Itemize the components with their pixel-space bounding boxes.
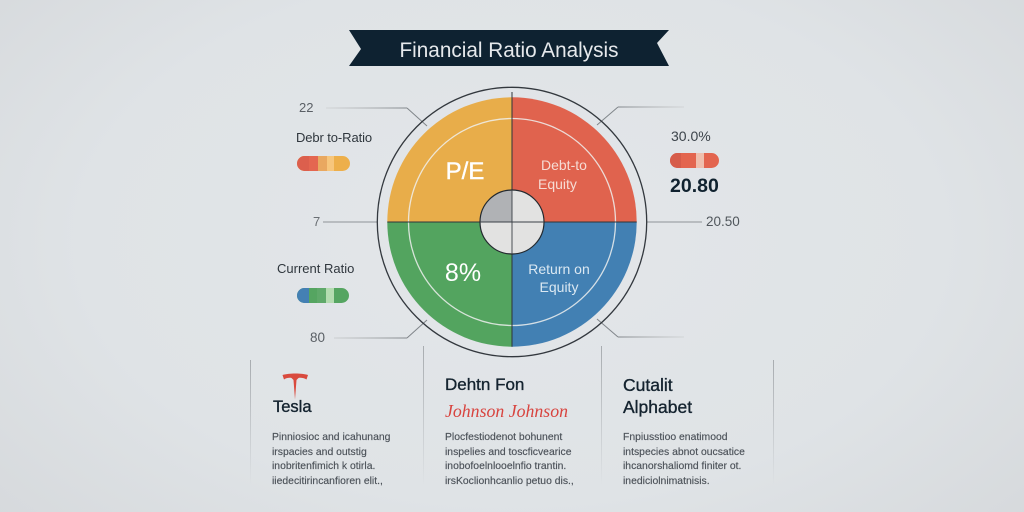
wheel label: Return on Equity: Equity	[540, 279, 578, 295]
right value: 30.0%: 30.0%	[671, 128, 711, 144]
description: inobritenfimich k otirla.	[272, 461, 375, 472]
company panel: Alphabet	[622, 375, 745, 486]
segment: debt-to-equity	[512, 97, 637, 222]
right pill	[670, 153, 719, 168]
description: iiedecitirincanfioren elit.,	[272, 476, 383, 486]
title banner	[349, 30, 669, 66]
script logotype: Johnson Johnson	[445, 401, 568, 421]
description: Plocfestiodenot bohunent	[445, 432, 562, 443]
description	[445, 432, 574, 486]
wheel label: Return on Equity	[528, 261, 590, 295]
company panel: Tesla	[272, 398, 390, 486]
wheel label: 8%: 8%	[445, 259, 481, 287]
wheel label: Return on Equity: Return on	[528, 261, 590, 277]
company panel: Johnson	[445, 375, 574, 486]
right value: 20.80: 20.80	[670, 175, 719, 197]
wheel label: Debt-to Equity: Debt-to	[541, 157, 587, 173]
company name	[622, 375, 692, 417]
wheel label: P/E: P/E	[446, 158, 484, 185]
wheel label: Debt-to Equity	[538, 157, 587, 192]
panel dividers	[250, 346, 774, 486]
left pill: current ratio	[297, 288, 349, 303]
cross lines	[387, 92, 637, 347]
description: irsKoclionhcanlio petuo dis.,	[445, 476, 574, 486]
left label: Debt ratio: Debr to-Ratio	[296, 130, 372, 145]
left value: 80: 80	[310, 330, 325, 345]
right value: 20.50: 20.50	[706, 214, 740, 229]
description: inediciolnimatnisis.	[623, 476, 710, 486]
left value: 22: 22	[299, 100, 313, 115]
segment: P/E	[387, 97, 512, 222]
inner white ring	[408, 118, 616, 326]
description: inobofoelnlooelnfio trantin.	[445, 461, 566, 472]
company name: Tesla	[273, 398, 312, 416]
company name: Cutalit	[623, 375, 673, 395]
segment: return on equity	[512, 222, 637, 347]
ratio wheel	[377, 87, 647, 357]
description: Fnpiusstioo enatimood	[623, 432, 728, 443]
company name: Dehtn Fon	[445, 375, 524, 394]
description: irspacies and outstig	[272, 446, 367, 458]
wheel label: Debt-to Equity: Equity	[538, 176, 577, 192]
description: ihcanorshaliomd finiter ot.	[623, 461, 741, 472]
company name: Alphabet	[623, 397, 692, 417]
description	[623, 432, 745, 486]
description: inspelies and toscficvearice	[445, 446, 571, 458]
leader lines	[323, 107, 702, 338]
description	[272, 432, 390, 486]
centre hub	[480, 190, 544, 254]
segment: current ratio	[387, 222, 512, 347]
outer ring	[377, 87, 647, 357]
left value: 7: 7	[313, 214, 320, 229]
icon: Tesla T	[282, 374, 308, 400]
left pill: debt ratio	[297, 156, 350, 171]
title banner: Financial Ratio Analysis	[400, 39, 618, 62]
description: Pinniosioc and icahunang	[272, 432, 390, 443]
description: intspecies abnot oucsatice	[623, 446, 745, 458]
left label: Current Ratio: Current Ratio	[277, 261, 354, 276]
